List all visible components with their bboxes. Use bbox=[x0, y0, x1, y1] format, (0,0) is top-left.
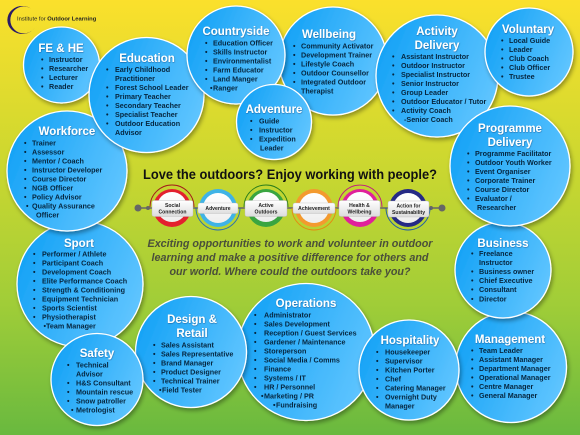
panel: Voluntary: Trustee bbox=[509, 72, 535, 81]
panel: Programme Delivery: • bbox=[467, 176, 470, 185]
panel: Sport: • bbox=[44, 322, 46, 331]
panel: Sport: Physiotherapist bbox=[42, 313, 97, 322]
panel: Operations: Storeperson bbox=[264, 346, 306, 355]
panel: Operations: Sales Development bbox=[264, 319, 331, 328]
panel: Adventure: • bbox=[250, 125, 253, 134]
panel: Operations: Finance bbox=[264, 364, 291, 373]
panel: Activity Delivery bbox=[376, 15, 498, 137]
panel: Workforce: • bbox=[24, 157, 27, 166]
panel: Wellbeing: Lifestyle Coach bbox=[301, 59, 354, 68]
panel: Workforce: Course Director bbox=[32, 175, 87, 184]
panel: Business: Consultant bbox=[479, 285, 517, 294]
panel: Education: • bbox=[106, 101, 109, 110]
panel: Education: • bbox=[106, 110, 109, 119]
badge: Active Outdoors: Outdoors bbox=[255, 210, 278, 216]
panel: Countryside: Skills Instructor bbox=[213, 47, 268, 56]
panel: Programme Delivery: Delivery bbox=[488, 137, 533, 149]
panel: Adventure: Guide bbox=[259, 116, 279, 125]
panel: Design & Retail: • bbox=[153, 358, 156, 367]
panel: Countryside: • bbox=[205, 47, 208, 56]
panel: Business: Director bbox=[479, 294, 507, 304]
panel: Voluntary: Club Officer bbox=[509, 63, 550, 72]
panel: Countryside: Environmentalist bbox=[213, 56, 272, 65]
panel: FE & HE: Reader bbox=[49, 82, 74, 91]
panel: Business: • bbox=[471, 267, 474, 276]
panel: Sport: Development Coach bbox=[42, 268, 111, 277]
panel: Programme Delivery: Outdoor Youth Worker bbox=[475, 158, 552, 167]
panel: Hospitality: Housekeeper bbox=[385, 347, 430, 356]
panel: Workforce: • bbox=[24, 166, 27, 175]
panel: Design & Retail: Technical Trainer bbox=[161, 376, 220, 385]
badge: Adventure bbox=[196, 189, 240, 230]
panel: Activity Delivery: • bbox=[392, 52, 395, 61]
panel: Sport: Performer / Athlete bbox=[42, 250, 106, 259]
panel: Design & Retail: Product Designer bbox=[161, 367, 221, 376]
panel: Safety: Metrologist bbox=[76, 405, 115, 414]
panel: Adventure: • bbox=[250, 116, 253, 125]
panel: Activity Delivery: Specialist Instructor bbox=[401, 70, 470, 79]
headline: Love the outdoors? Enjoy working with people? bbox=[143, 167, 437, 182]
panel: Programme Delivery: Corporate Trainer bbox=[475, 176, 536, 185]
panel: Workforce: Officer bbox=[36, 211, 59, 220]
panel: Programme Delivery: • bbox=[467, 158, 470, 167]
panel: Sport: Strength & Conditioning bbox=[42, 286, 125, 295]
panel: Activity Delivery: • bbox=[392, 61, 395, 70]
panel: Education: • bbox=[106, 92, 109, 101]
panel: Management: • bbox=[471, 373, 474, 382]
panel: Wellbeing: Community Activator bbox=[301, 41, 374, 50]
panel: Sport: • bbox=[33, 277, 36, 286]
panel: Hospitality: Overnight Duty bbox=[385, 392, 437, 401]
panel: Activity Delivery: • bbox=[392, 106, 395, 115]
panel: Activity Delivery: -Senior Coach bbox=[404, 115, 453, 124]
panel: Operations: • bbox=[254, 319, 257, 328]
panel: Activity Delivery: • bbox=[392, 97, 395, 106]
panel: Sport: • bbox=[33, 304, 36, 313]
panel: Voluntary: Local Guide bbox=[509, 36, 550, 45]
panel: Countryside: Farm Educator bbox=[213, 65, 264, 74]
values chain bbox=[134, 185, 446, 230]
panel: Adventure: Expedition bbox=[259, 134, 296, 143]
panel: Voluntary bbox=[485, 8, 573, 96]
panel: Countryside: • bbox=[205, 65, 208, 74]
panel: Education: Primary Teacher bbox=[115, 92, 171, 101]
panel: Safety bbox=[51, 334, 143, 426]
panel: Management: • bbox=[471, 382, 474, 391]
panel: Programme Delivery: • bbox=[467, 167, 470, 176]
panel: Wellbeing: • bbox=[293, 77, 296, 86]
panel: Education: • bbox=[106, 65, 109, 74]
panel: Hospitality: • bbox=[376, 392, 379, 401]
panel: Sport: Elite Performance Coach bbox=[42, 277, 127, 286]
panel: Countryside: Countryside bbox=[202, 26, 270, 38]
panel: Programme Delivery: • bbox=[467, 185, 470, 194]
panel: Operations: • bbox=[254, 346, 257, 355]
badge: Health & Wellbeing: Health & bbox=[349, 203, 370, 209]
panel: Activity Delivery: Activity bbox=[416, 26, 458, 38]
panel: Workforce bbox=[7, 111, 127, 231]
panel: Hospitality: • bbox=[376, 347, 379, 356]
panel: Education: Outdoor Education bbox=[115, 119, 180, 128]
panel: Design & Retail: Retail bbox=[176, 328, 208, 340]
panel: Hospitality: • bbox=[376, 374, 379, 383]
panel: Wellbeing bbox=[279, 7, 387, 115]
panel: Operations: Fundraising bbox=[276, 400, 317, 409]
panel: Operations bbox=[238, 284, 374, 420]
panel: Workforce: Policy Advisor bbox=[32, 193, 82, 202]
badge: Social Connection: Connection bbox=[158, 210, 187, 216]
panel: Operations: • bbox=[254, 355, 257, 364]
panel: Activity Delivery: Activity Coach bbox=[401, 106, 451, 115]
logo: Institute for Outdoor Learning bbox=[17, 16, 97, 22]
panel: Workforce: • bbox=[24, 148, 27, 157]
panel: Adventure: Leader bbox=[260, 143, 284, 152]
panel: Countryside: • bbox=[205, 74, 208, 83]
panel: Wellbeing: Integrated Outdoor bbox=[301, 77, 366, 86]
panel: Countryside: • bbox=[210, 83, 213, 92]
panel: Management: General Manager bbox=[479, 391, 538, 400]
logo bbox=[7, 6, 97, 34]
panel: Workforce: NGB Officer bbox=[32, 184, 73, 193]
panel: Sport: Sports Scientist bbox=[42, 304, 97, 313]
panel: Voluntary: • bbox=[501, 36, 504, 45]
panel: Programme Delivery: • bbox=[467, 194, 470, 203]
panel: Activity Delivery: Senior Instructor bbox=[401, 79, 459, 88]
panel: Sport: Sport bbox=[64, 238, 94, 250]
panel: Management: • bbox=[471, 355, 474, 364]
panel: Activity Delivery: Delivery bbox=[415, 40, 460, 52]
tagline: our world. Where could the outdoors take you? bbox=[170, 266, 411, 278]
panel: Workforce: • bbox=[24, 184, 27, 193]
panel: Sport: • bbox=[33, 313, 36, 322]
panel: Workforce: • bbox=[24, 193, 27, 202]
panel: Education: Early Childhood bbox=[115, 65, 170, 74]
panel: Business: Business bbox=[477, 238, 529, 250]
panel: Design & Retail: • bbox=[153, 340, 156, 349]
panel: Education: Secondary Teacher bbox=[115, 101, 181, 110]
panel: Business: Freelance bbox=[479, 249, 513, 258]
panel: Programme Delivery: Programme bbox=[478, 123, 542, 135]
panel: Activity Delivery: Assistant Instructor bbox=[401, 52, 469, 61]
panel: Business: • bbox=[471, 285, 474, 294]
panel: Business: Instructor bbox=[479, 258, 513, 267]
panel: Design & Retail: Sales Representative bbox=[161, 349, 233, 358]
panel: Countryside: Ranger bbox=[213, 83, 238, 92]
panel: Business: Chief Executive bbox=[479, 276, 533, 285]
panel: Programme Delivery bbox=[450, 106, 570, 226]
panel: FE & HE: • bbox=[41, 64, 44, 73]
panel: Operations: Administrator bbox=[264, 310, 311, 319]
panel: Design & Retail: Brand Manager bbox=[161, 358, 214, 367]
panel: Operations: Gardener / Maintenance bbox=[264, 337, 345, 346]
panel: Operations: • bbox=[254, 382, 257, 391]
panel: Design & Retail: • bbox=[153, 376, 156, 385]
panel: Safety: Technical bbox=[76, 360, 109, 369]
panel: Workforce: • bbox=[24, 175, 27, 184]
panel: Operations: Marketing / PR bbox=[264, 391, 315, 400]
badge: Achievement bbox=[292, 189, 336, 230]
panel: Operations: • bbox=[261, 391, 264, 400]
panel: Sport: • bbox=[33, 295, 36, 304]
panel: Safety: H&S Consultant bbox=[76, 378, 131, 387]
panel: Business: • bbox=[471, 276, 474, 285]
panel: Workforce: Trainer bbox=[32, 139, 56, 148]
panel: Design & Retail: • bbox=[153, 349, 156, 358]
panel: Business bbox=[455, 222, 551, 318]
panel: Education: Education bbox=[119, 53, 175, 65]
panel: Wellbeing: Wellbeing bbox=[302, 29, 356, 41]
panel: Operations: HR / Personnel bbox=[264, 382, 315, 391]
panel: Education: • bbox=[106, 119, 109, 128]
panel: Hospitality: Catering Manager bbox=[385, 383, 446, 392]
panel: Adventure: • bbox=[250, 134, 253, 143]
panel: Management: • bbox=[471, 364, 474, 373]
badge: Achievement: Achievement bbox=[298, 206, 330, 212]
panel: Management: • bbox=[471, 391, 474, 400]
panel: Workforce: • bbox=[24, 139, 27, 148]
badge: Social Connection bbox=[150, 185, 194, 227]
panel: Design & Retail: • bbox=[153, 367, 156, 376]
panel: Wellbeing: • bbox=[293, 41, 296, 50]
panel: Management: Centre Manager bbox=[479, 382, 534, 391]
panel: Education bbox=[89, 38, 204, 152]
panel: Operations: • bbox=[254, 364, 257, 373]
panel: Safety: Snow patroller bbox=[76, 396, 126, 405]
panel: Workforce: • bbox=[26, 202, 29, 211]
panel: Business: • bbox=[471, 294, 474, 304]
tagline: Exciting opportunities to work and volunteer in outdoor bbox=[148, 238, 433, 250]
panel: Safety: • bbox=[71, 405, 74, 414]
panel: Operations: • bbox=[273, 400, 276, 409]
panel: Education: Advisor bbox=[115, 128, 142, 137]
panel: Wellbeing: • bbox=[293, 50, 296, 59]
panel: Countryside: Land Manger bbox=[213, 74, 258, 83]
panel: Workforce: Assessor bbox=[32, 148, 65, 157]
badge: Action for Sustainability bbox=[386, 189, 430, 230]
panel: Activity Delivery: • bbox=[392, 79, 395, 88]
panel: FE & HE: • bbox=[41, 55, 44, 64]
panel: Design & Retail: Field Tester bbox=[162, 385, 202, 394]
panel: Safety: Safety bbox=[80, 348, 115, 360]
panel: Workforce: Instructor Developer bbox=[32, 166, 102, 175]
panel: Countryside: • bbox=[205, 56, 208, 65]
panel: Adventure: Adventure bbox=[246, 104, 302, 116]
badge: Adventure: Adventure bbox=[205, 206, 231, 212]
panel: FE & HE: Instructor bbox=[49, 55, 83, 64]
panel: Operations: Social Media / Comms bbox=[264, 355, 340, 364]
panel: Sport: • bbox=[33, 259, 36, 268]
panel: Operations: Operations bbox=[276, 298, 336, 310]
panel: Operations: • bbox=[254, 337, 257, 346]
panel: Operations: Reception / Guest Services bbox=[264, 328, 357, 337]
panel: Hospitality: Hospitality bbox=[381, 335, 440, 347]
panel: Programme Delivery: Programme Facilitator bbox=[475, 149, 551, 158]
panel: Management: Department Manager bbox=[479, 364, 551, 373]
panel: Adventure: Instructor bbox=[259, 125, 293, 134]
panel: Management bbox=[456, 312, 566, 422]
panel: FE & HE bbox=[24, 27, 100, 103]
panel: Activity Delivery: Outdoor Educator / Tutor bbox=[401, 97, 487, 106]
panel: Sport: Participant Coach bbox=[42, 259, 103, 268]
panel: Voluntary: • bbox=[501, 72, 504, 81]
panel: Adventure bbox=[236, 84, 312, 160]
panel: Countryside: • bbox=[205, 38, 208, 47]
panel: Design & Retail: Sales Assistant bbox=[161, 340, 214, 349]
panel: Hospitality: • bbox=[376, 356, 379, 365]
panel: FE & HE: • bbox=[41, 82, 44, 91]
panel: Operations: • bbox=[254, 310, 257, 319]
panel: Design & Retail: Design & bbox=[167, 314, 217, 326]
panel: Voluntary: • bbox=[501, 45, 504, 54]
panel: Sport: • bbox=[33, 250, 36, 259]
panel: Wellbeing: Development Trainer bbox=[301, 50, 372, 59]
panel: Programme Delivery: • bbox=[467, 149, 470, 158]
panel: Hospitality: • bbox=[376, 365, 379, 374]
panel: Safety: • bbox=[67, 396, 70, 405]
panel: Education: Specialist Teacher bbox=[115, 110, 178, 119]
panel: Activity Delivery: Outdoor Instructor bbox=[401, 61, 465, 70]
panel: Hospitality: Chef bbox=[385, 374, 402, 383]
panel: Management: Operational Manager bbox=[479, 373, 551, 382]
panel: Countryside: Education Officer bbox=[213, 38, 273, 47]
panel: Design & Retail: • bbox=[159, 385, 162, 394]
panel: Safety: • bbox=[67, 378, 70, 387]
panel: Hospitality: Supervisor bbox=[385, 356, 423, 365]
panel: Hospitality: Manager bbox=[385, 401, 415, 410]
panel: Voluntary: • bbox=[501, 54, 504, 63]
tagline: learning and make a positive difference for others and bbox=[152, 252, 429, 264]
badge: Health & Wellbeing bbox=[338, 185, 382, 227]
panel: Operations: Systems / IT bbox=[264, 373, 307, 382]
panel: Workforce: Quality Assurance bbox=[32, 202, 95, 211]
panel: Activity Delivery: • bbox=[392, 70, 395, 79]
panel: Voluntary: Voluntary bbox=[502, 24, 555, 36]
panel: Voluntary: • bbox=[501, 63, 504, 72]
panel: Hospitality bbox=[359, 320, 459, 420]
panel: Wellbeing: • bbox=[293, 59, 296, 68]
panel: Programme Delivery: Event Organiser bbox=[475, 167, 531, 176]
panel: Safety: • bbox=[67, 360, 70, 369]
panel: FE & HE: FE & HE bbox=[38, 43, 84, 55]
panel: Safety: Mountain rescue bbox=[76, 387, 133, 396]
panel: Hospitality: • bbox=[376, 383, 379, 392]
panel: Sport: Team Manager bbox=[46, 322, 96, 331]
panel: Design & Retail bbox=[136, 296, 246, 408]
panel: Education: Forest School Leader bbox=[115, 83, 189, 92]
panel: Countryside bbox=[187, 6, 285, 104]
panel: Programme Delivery: Researcher bbox=[477, 203, 516, 212]
panel: Wellbeing: Outdoor Counsellor bbox=[301, 68, 369, 77]
panel: Activity Delivery: Group Leader bbox=[401, 88, 448, 97]
badge: Health & Wellbeing: Wellbeing bbox=[348, 210, 371, 216]
panel: Business: Business owner bbox=[479, 267, 534, 276]
badge: Active Outdoors: Active bbox=[258, 203, 274, 209]
panel: Operations: • bbox=[254, 373, 257, 382]
panel: Workforce: Workforce bbox=[39, 126, 95, 138]
panel: Voluntary: Leader bbox=[509, 45, 533, 54]
panel: Education: • bbox=[106, 83, 109, 92]
badge: Action for Sustainability: Action for bbox=[396, 204, 421, 210]
panel: Business: • bbox=[471, 249, 474, 258]
panel: Voluntary: Club Coach bbox=[509, 54, 549, 63]
panel: Programme Delivery: Course Director bbox=[475, 185, 530, 194]
panel: Safety: • bbox=[67, 387, 70, 396]
panel: Management: Management bbox=[475, 334, 545, 346]
panel: FE & HE: Lecturer bbox=[49, 73, 78, 82]
panel: Activity Delivery: • bbox=[392, 88, 395, 97]
badge: Action for Sustainability: Sustainability bbox=[392, 210, 425, 216]
badge: Social Connection: Social bbox=[165, 203, 181, 209]
panel: Operations: • bbox=[254, 328, 257, 337]
panel: Workforce: Mentor / Coach bbox=[32, 157, 84, 166]
panel: Programme Delivery: Evaluator / bbox=[475, 194, 512, 203]
panel: Hospitality: Kitchen Porter bbox=[385, 365, 435, 374]
panel: Wellbeing: Therapist bbox=[301, 86, 334, 95]
badge: Active Outdoors bbox=[244, 185, 288, 227]
panel: Education: Practitioner bbox=[115, 74, 155, 83]
panel: Sport bbox=[17, 221, 143, 347]
panel: Sport: • bbox=[33, 286, 36, 295]
panel: Safety: Advisor bbox=[76, 369, 103, 378]
panel: FE & HE: • bbox=[41, 73, 44, 82]
panel: Management: • bbox=[471, 346, 474, 355]
panel: Management: Assistant Manager bbox=[479, 355, 543, 364]
panel: Management: Team Leader bbox=[479, 346, 523, 355]
panel: Wellbeing: • bbox=[293, 68, 296, 77]
panel: Sport: • bbox=[33, 268, 36, 277]
panel: FE & HE: Researcher bbox=[49, 64, 88, 73]
panel: Sport: Equipment Technician bbox=[42, 295, 118, 304]
